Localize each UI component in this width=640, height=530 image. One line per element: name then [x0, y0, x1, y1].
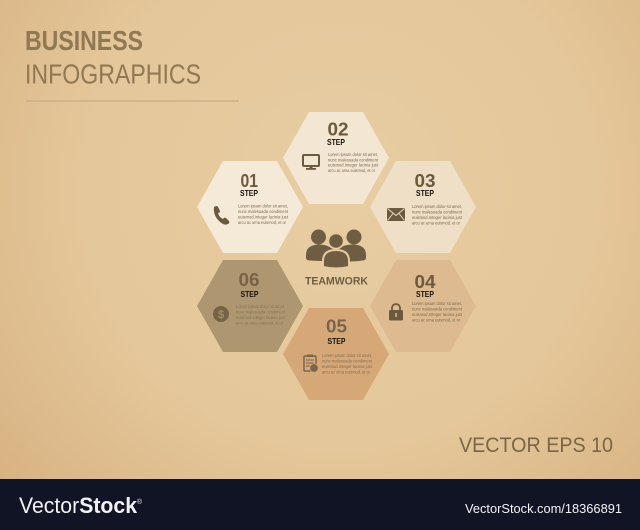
hexagon 05 step: 05: [326, 316, 347, 336]
body text: [238, 204, 289, 226]
hexagon 06 step: [197, 260, 303, 352]
body text: arcu ac urna euismod, et or: [328, 168, 375, 174]
body text: nunc malesuada condiment: [236, 310, 286, 316]
body text: euismod.Integer lacinia just: [238, 214, 289, 220]
body text: [412, 204, 463, 226]
body text: [236, 304, 286, 326]
hexagon 02 step: STEP: [327, 137, 345, 147]
body text: euismod.Integer lacinia just: [236, 315, 286, 321]
body text: arcu ac urna euismod, et or: [322, 370, 370, 376]
hexagon 03 step: 03: [414, 170, 436, 191]
footer url: VectorStock.com/18366891: [465, 501, 622, 516]
body text: nunc malesuada condiment: [412, 210, 463, 216]
body text: arcu ac urna euismod, et or: [412, 220, 460, 226]
hexagon 04 step: 04: [414, 271, 436, 292]
hexagon 01 step: STEP: [240, 188, 258, 198]
body text: [322, 353, 373, 376]
body text: [328, 152, 379, 174]
title: [25, 25, 201, 90]
title: BUSINESS: [25, 25, 143, 56]
hexagon 03 step: STEP: [416, 188, 434, 198]
body text: Lorem ipsum dolor sit amet,: [328, 152, 378, 158]
body text: nunc malesuada condiment: [412, 306, 463, 312]
body text: nunc malesuada condiment: [322, 358, 373, 364]
icon: clipboard with coin: [304, 354, 318, 372]
hexagon 03 step: [370, 161, 476, 253]
body text: euismod.Integer lacinia just: [322, 364, 373, 370]
body text: Lorem ipsum dolor sit amet,: [238, 204, 288, 210]
body text: Lorem ipsum dolor sit amet,: [412, 204, 462, 210]
title: INFOGRAPHICS: [25, 58, 201, 90]
body text: Lorem ipsum dolor sit amet,: [412, 301, 462, 307]
footer logo: VectorStock: [19, 493, 139, 518]
footer bar: [0, 479, 640, 530]
icon: phone: [214, 206, 229, 225]
icon: lock: [389, 304, 403, 320]
body text: euismod.Integer lacinia just: [412, 312, 463, 318]
hexagon 02 step: 02: [328, 118, 348, 140]
body text: arcu ac urna euismod, et or: [236, 320, 283, 326]
hexagon 04 step: STEP: [416, 289, 434, 299]
body text: Lorem ipsum dolor sit amet,: [236, 304, 285, 310]
vector eps label: VECTOR EPS 10: [459, 433, 613, 457]
hexagon 04 step: [370, 260, 476, 352]
icon: teamwork people: [306, 230, 366, 268]
body text: nunc malesuada condiment: [238, 209, 289, 215]
body text: euismod.Integer lacinia just: [412, 215, 463, 221]
hexagon 02 step: [283, 112, 389, 204]
hexagon 06 step: STEP: [240, 289, 259, 299]
body text: [412, 301, 463, 324]
body text: Lorem ipsum dolor sit amet,: [322, 353, 372, 359]
hexagon 06 step: 06: [238, 269, 260, 290]
hexagon 05 step: [283, 308, 389, 400]
body text: arcu ac urna euismod, et or: [238, 220, 286, 226]
hexagon 01 step: [197, 161, 303, 253]
icon: monitor: [303, 155, 319, 170]
icon: envelope: [387, 208, 405, 221]
body text: euismod.Integer lacinia just: [328, 163, 379, 169]
body text: nunc malesuada condiment: [328, 157, 379, 163]
hexagon 05 step: STEP: [328, 336, 346, 346]
body text: arcu ac urna euismod, et or: [412, 318, 460, 324]
footer logo: ®: [137, 498, 143, 506]
teamwork label: TEAMWORK: [305, 276, 368, 288]
icon: dollar coin: $: [218, 309, 224, 321]
hexagon 01 step: 01: [240, 170, 258, 191]
